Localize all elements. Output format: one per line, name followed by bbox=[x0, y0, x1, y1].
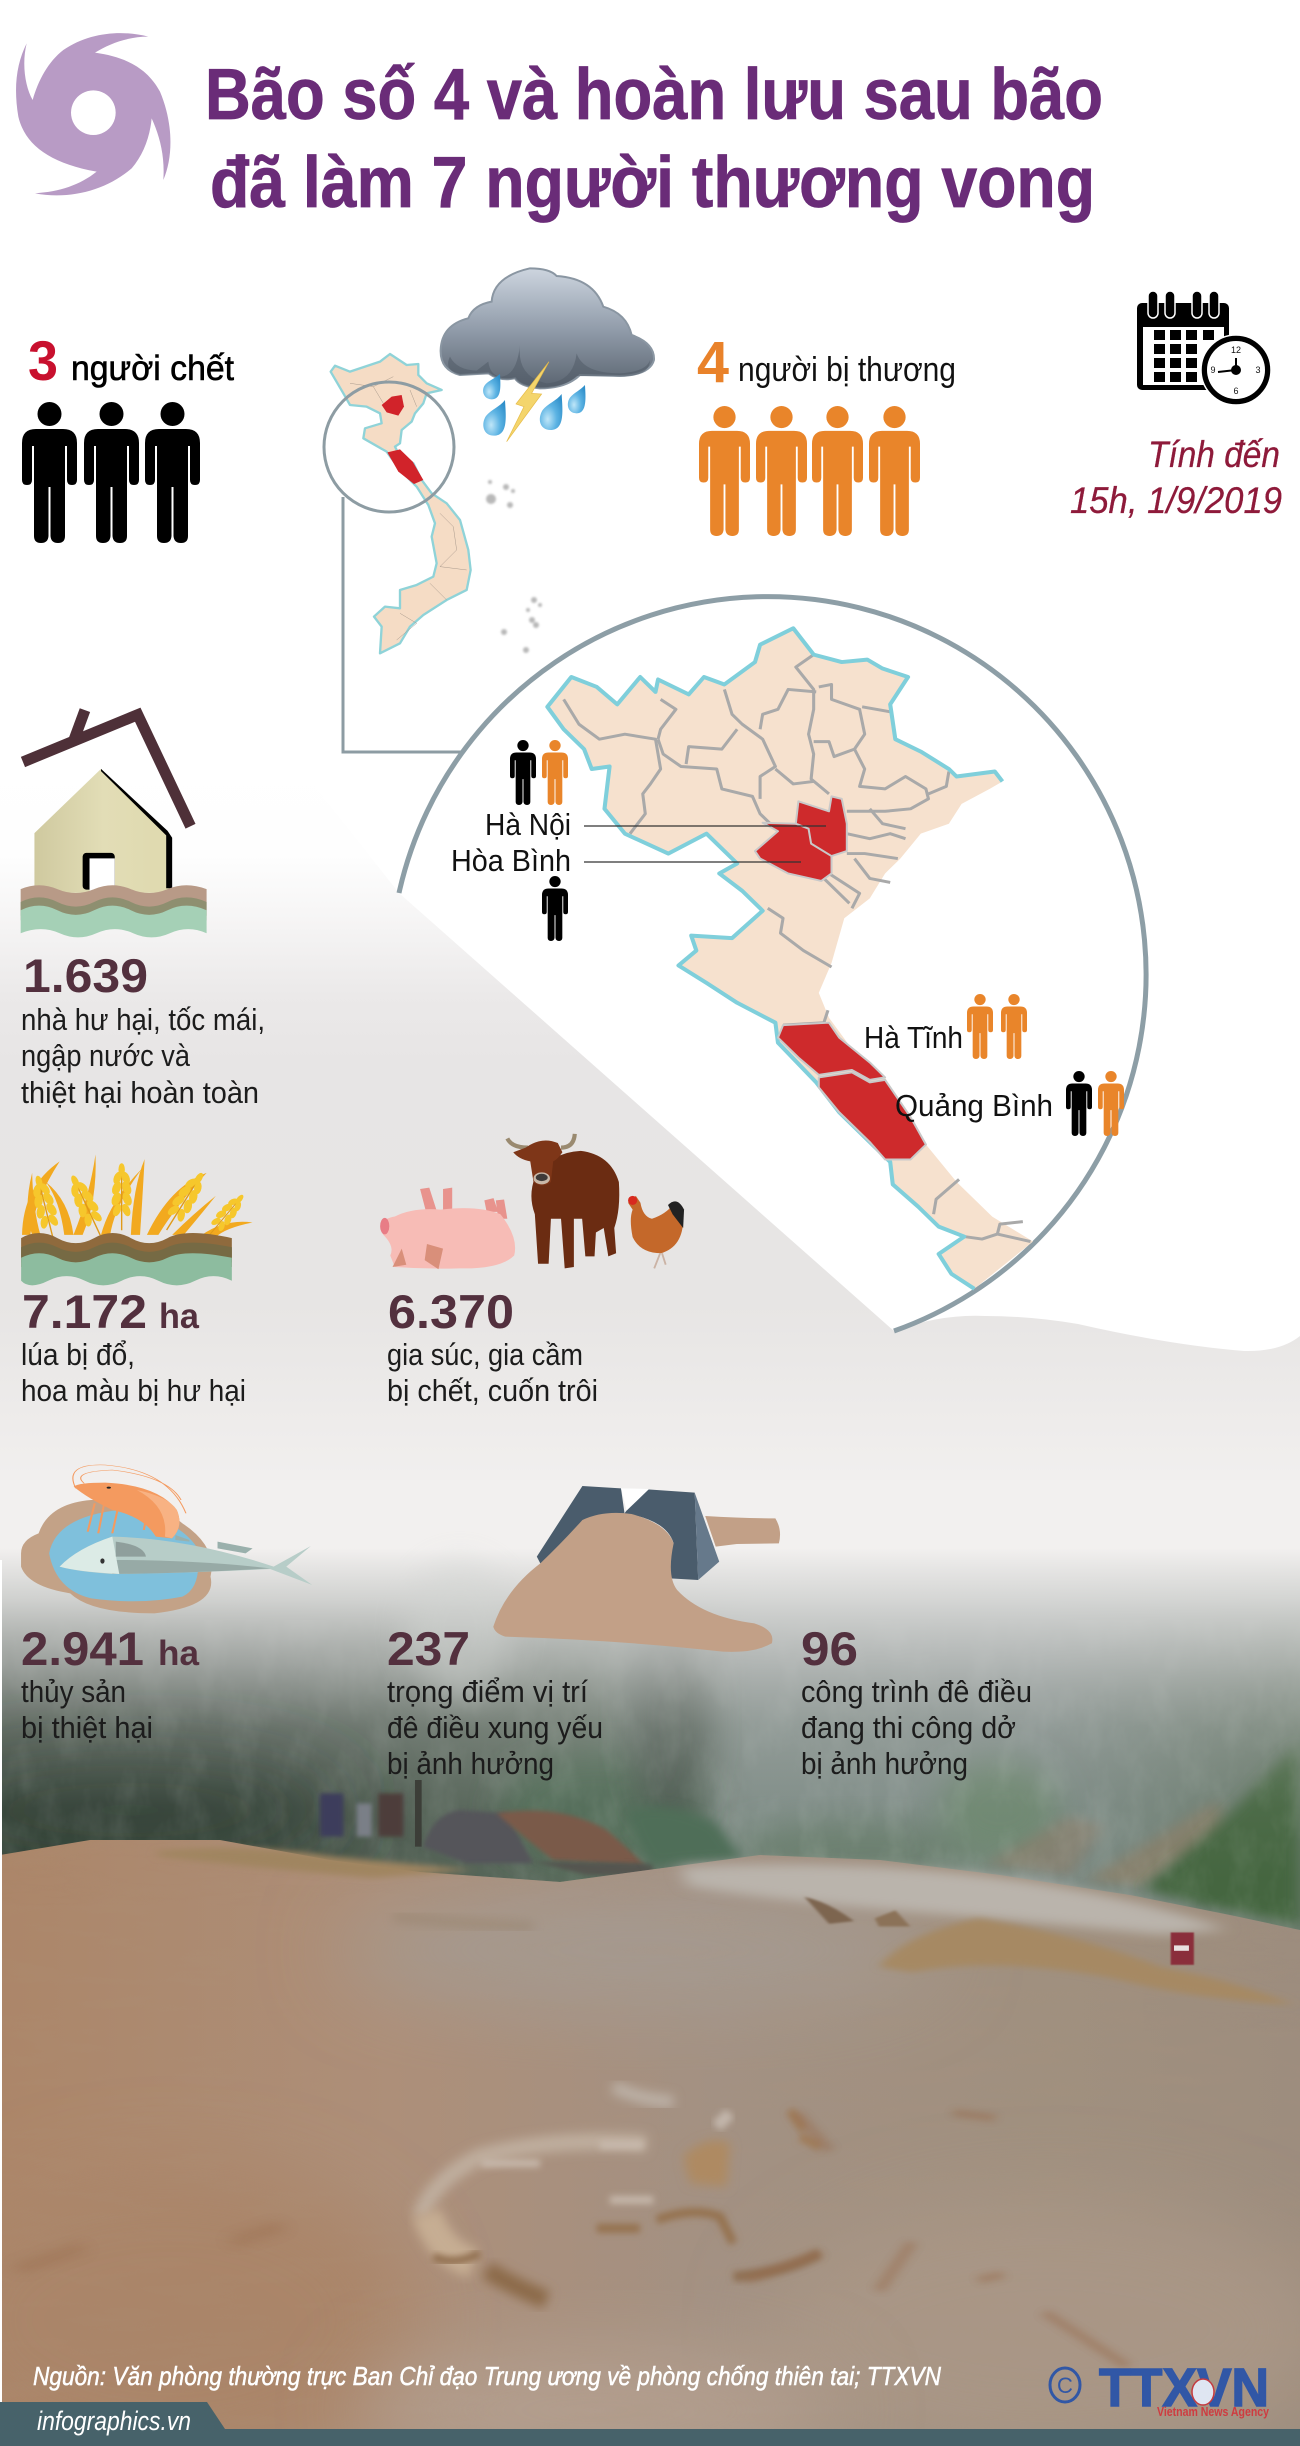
stat: houses bbox=[21, 949, 265, 1110]
icon: flooded rice bbox=[21, 1155, 253, 1285]
grey gradient panel bbox=[0, 760, 1300, 1900]
stat: dike works bbox=[801, 1622, 1032, 1781]
stat: dike points: trọng điểm vị trí bbox=[387, 1674, 588, 1709]
stat: dike works: bị ảnh hưởng bbox=[801, 1746, 968, 1781]
muddy water bbox=[0, 1830, 1300, 2446]
stat: aquaculture: ha bbox=[158, 1634, 200, 1673]
people and mound on the road bbox=[320, 1780, 760, 1877]
map label: Ha Tinh bbox=[864, 994, 1027, 1059]
zoomed map of affected provinces bbox=[547, 628, 1033, 1289]
stat: rice bbox=[21, 1285, 246, 1408]
Hanoi and Hoa Binh highlighted bbox=[755, 796, 847, 881]
title: Bão số 4 và hoàn lưu sau bão bbox=[205, 55, 1103, 135]
date note: 15h, 1/9/2019 bbox=[1070, 480, 1282, 521]
stat: dike works: công trình đê điều bbox=[801, 1674, 1032, 1709]
icon: storm cloud with rain and lightning bbox=[441, 268, 654, 442]
stat: rice: ha bbox=[159, 1297, 200, 1336]
icon: dike section bbox=[493, 1486, 780, 1652]
icon: cyclone bbox=[16, 33, 170, 195]
website label: infographics.vn bbox=[37, 2406, 191, 2436]
stat: houses: 1.639 bbox=[23, 949, 148, 1002]
map label: Ha Noi and Hoa Binh: Hòa Bình bbox=[451, 843, 571, 878]
stat: livestock bbox=[387, 1285, 598, 1408]
panel: 3 deaths bbox=[22, 329, 234, 543]
pig bbox=[380, 1188, 515, 1269]
small Vietnam locator map bbox=[331, 354, 471, 653]
date note: Tính đến bbox=[1148, 434, 1280, 475]
map label: Ha Noi and Hoa Binh: Hà Nội bbox=[485, 807, 571, 842]
Ha Tinh and Quang Binh highlighted bbox=[778, 1023, 926, 1159]
streaks in the lower water bbox=[17, 2113, 1128, 2366]
map label: Quang Binh: Quảng Bình bbox=[895, 1088, 1053, 1123]
title bbox=[205, 55, 1103, 223]
map label: Quang Binh bbox=[895, 1071, 1124, 1136]
icon: calendar and clock: 6 bbox=[1233, 386, 1239, 396]
stat: dike points: 237 bbox=[387, 1622, 470, 1675]
footer bar bbox=[0, 2402, 1300, 2446]
stat: livestock: gia súc, gia cầm bbox=[387, 1337, 583, 1372]
big magnifier arc bbox=[399, 597, 1146, 1331]
map label: Ha Noi and Hoa Binh bbox=[451, 740, 826, 941]
icon: calendar and clock: 3 bbox=[1255, 365, 1261, 375]
stat: rice: lúa bị đổ, bbox=[21, 1337, 135, 1372]
stat: dike points: bị ảnh hưởng bbox=[387, 1746, 554, 1781]
logo: TTXVN: TTXVN bbox=[1099, 2358, 1269, 2418]
forest bbox=[0, 1480, 1300, 1960]
stat: rice: 7.172 bbox=[22, 1285, 147, 1338]
islands bbox=[486, 480, 542, 653]
panel: 3 deaths: người chết bbox=[71, 349, 234, 388]
title: đã làm 7 người thương vong bbox=[210, 143, 1095, 223]
date note bbox=[1070, 434, 1282, 521]
locator circle and connector bbox=[324, 382, 461, 752]
foam patch in the foreground bbox=[393, 1917, 820, 2300]
flood photo background bbox=[0, 1480, 1300, 2446]
panel: 4 injured bbox=[697, 330, 956, 536]
icon: calendar and clock bbox=[1137, 291, 1271, 405]
panel: 4 injured: 4 bbox=[697, 330, 729, 395]
mist patch bbox=[405, 1560, 515, 1700]
logo: TTXVN: Vietnam News Agency bbox=[1157, 2404, 1270, 2419]
icon: calendar and clock: 12 bbox=[1231, 345, 1241, 355]
stat: rice: hoa màu bị hư hại bbox=[21, 1373, 246, 1408]
stat: dike points: đê điều xung yếu bbox=[387, 1710, 603, 1745]
icon: shrimp, fish and pond bbox=[21, 1465, 312, 1613]
stat: dike points bbox=[387, 1622, 603, 1781]
stat: livestock: 6.370 bbox=[388, 1285, 514, 1338]
stat: houses: ngập nước và bbox=[21, 1038, 191, 1073]
logo: TTXVN: C bbox=[1057, 2373, 1073, 2398]
stat: aquaculture bbox=[21, 1622, 200, 1745]
stat: dike works: đang thi công dở bbox=[801, 1710, 1016, 1745]
source note: Nguồn: Văn phòng thường trực Ban Chỉ đạo Trung ương về phòng chống thiên tai; TTXVN bbox=[33, 2361, 941, 2391]
map label: Ha Tinh: Hà Tĩnh bbox=[864, 1020, 963, 1055]
stat: houses: thiệt hại hoàn toàn bbox=[21, 1075, 259, 1110]
stat: aquaculture: thủy sản bbox=[21, 1674, 126, 1709]
icon: calendar and clock: 9 bbox=[1210, 365, 1216, 375]
panel: 4 injured: người bị thương bbox=[738, 351, 956, 389]
stat: dike works: 96 bbox=[801, 1622, 858, 1675]
rapids and debris far bbox=[158, 1848, 1293, 2005]
panel: 3 deaths: 3 bbox=[28, 329, 58, 392]
stat: livestock: bị chết, cuốn trôi bbox=[387, 1373, 598, 1408]
icon: flooded house bbox=[21, 710, 207, 937]
cow bbox=[507, 1134, 619, 1268]
chicken bbox=[628, 1196, 684, 1268]
fog bbox=[0, 1480, 1300, 1890]
stat: aquaculture: 2.941 bbox=[21, 1622, 144, 1675]
stat: houses: nhà hư hại, tốc mái, bbox=[21, 1002, 265, 1037]
stat: aquaculture: bị thiệt hại bbox=[21, 1710, 153, 1745]
icon: dead livestock bbox=[380, 1134, 684, 1269]
